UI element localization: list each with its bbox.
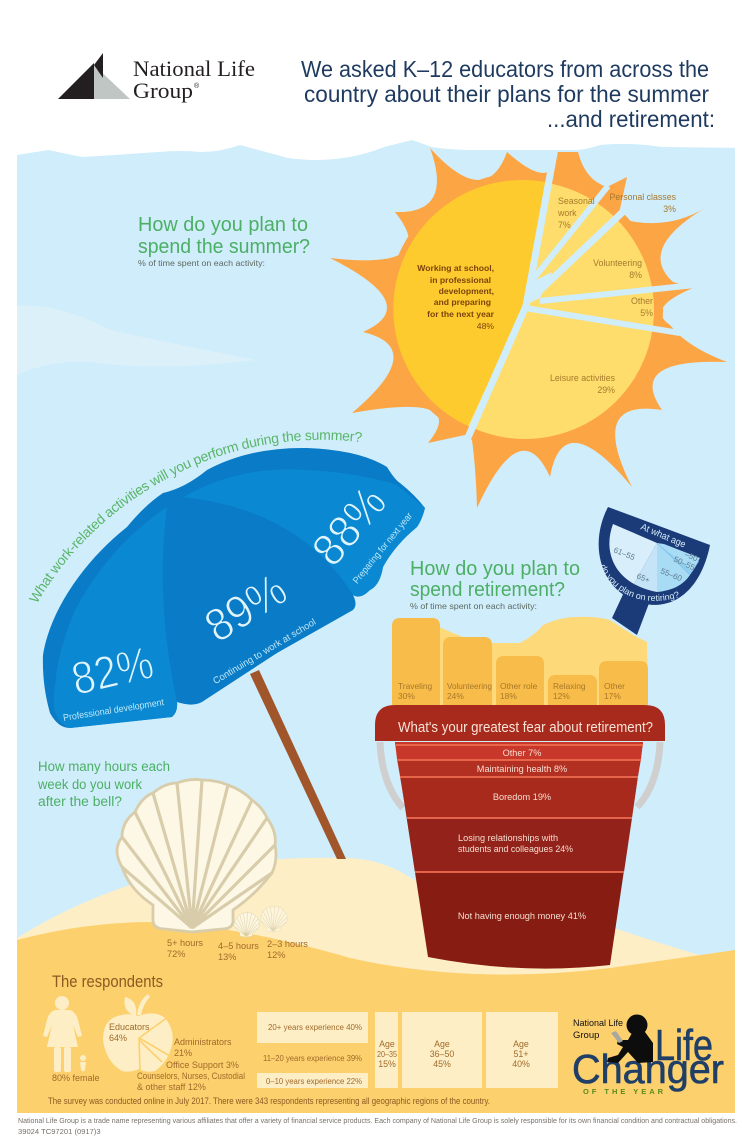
stat: 82%: 82% [67, 636, 158, 705]
cloud [17, 306, 255, 375]
icon: woman and child [43, 996, 86, 1072]
logo: National Life Group [58, 53, 255, 103]
stat: 89%: 89% [195, 563, 296, 652]
background: sky [17, 140, 735, 970]
umbrella panel: left [54, 507, 177, 728]
umbrella pole [250, 670, 346, 859]
band labels: Boredom 19% [493, 792, 551, 802]
logo: Life Changer of the Year: OF THE YEAR [583, 1087, 664, 1096]
logo: Life Changer of the Year: National Life [573, 1018, 623, 1029]
band: maintaining health 8% [397, 759, 641, 776]
panel: age boxes: Age [379, 1039, 395, 1049]
logo: Life Changer of the Year: Changer [572, 1046, 724, 1092]
panel: shovel retirement age chart: do you plan on retiring? [602, 564, 678, 601]
band labels: Losing relationships with [458, 833, 558, 843]
footer disclaimer [18, 1116, 737, 1136]
slice label: working at school: development, [439, 286, 494, 296]
band: boredom 19% [400, 776, 638, 818]
heading: summer: % of time spent on each activity: [138, 258, 265, 268]
band: losing relationships 24% [407, 818, 632, 872]
age labels [612, 546, 700, 585]
slice label: working at school: and preparing [434, 297, 491, 307]
slice labels: other activities: Other [631, 296, 653, 306]
heading: the respondents: The respondents [52, 972, 163, 991]
panel: age boxes: Age [513, 1039, 529, 1049]
bar: relaxing 12% [548, 675, 597, 705]
slice labels: other activities [550, 192, 677, 395]
heading: summer [138, 214, 310, 268]
slice label: working at school: in professional [430, 275, 491, 285]
bar: traveling 30%: Traveling [398, 681, 432, 691]
panel: age boxes: 15% [378, 1059, 396, 1069]
heading: hours after the bell: How many hours each [38, 759, 170, 774]
age labels: 61–55 [612, 546, 637, 562]
shovel text: At what age [639, 522, 687, 551]
bar: other 17%: 17% [604, 691, 621, 701]
heading: hours after the bell [37, 759, 170, 809]
logo: Life Changer of the Year: Group [573, 1030, 599, 1041]
bar: other role 18%: Other role [500, 681, 538, 691]
age labels: –50 [683, 550, 700, 564]
age labels: 65+ [635, 572, 652, 585]
arc heading: work-related activities: What work-related activities will you perform during the summer? [28, 431, 362, 602]
logo: Life Changer of the Year [572, 1014, 724, 1096]
label: 80% female: 80% female [52, 1073, 100, 1083]
apple labels [109, 1022, 245, 1092]
slice labels: other activities: 29% [597, 385, 615, 395]
slice label: working at school: for the next year [427, 309, 495, 319]
apple slice lines [139, 1017, 170, 1071]
shell labels: 2–3 hours [267, 939, 308, 949]
band: other 7% [395, 742, 643, 759]
icon: apple [103, 994, 173, 1072]
panel: sand bar chart [392, 617, 648, 705]
heading: retirement: % of time spent on each activity: [410, 601, 537, 611]
slice labels: other activities: 5% [640, 308, 653, 318]
panel: age boxes: 20–35 [377, 1050, 397, 1059]
icon: small shell [260, 906, 287, 932]
slice labels: other activities: work [557, 208, 577, 218]
sand: light dune [17, 858, 735, 1000]
band labels: students and colleagues 24% [458, 844, 573, 854]
bucket handle [380, 742, 660, 808]
title: country about their plans for the summer [304, 81, 709, 107]
bar: volunteering 24% [443, 637, 492, 705]
shovel handle [612, 588, 651, 635]
panel: umbrella chart [43, 448, 425, 728]
label: preparing for next year: Preparing for next year [351, 511, 415, 586]
apple labels: 21% [174, 1048, 192, 1058]
panel: experience boxes [257, 1012, 368, 1088]
apple labels: Counselors, Nurses, Custodial [137, 1071, 245, 1081]
footer disclaimer: 39024 TC97201 (0917)3 [18, 1127, 101, 1136]
shell labels: 12% [267, 950, 285, 960]
rim heading: What's your greatest fear about retirement? [398, 720, 653, 736]
slice labels: other activities: 8% [629, 270, 642, 280]
band labels: Not having enough money 41% [458, 911, 586, 921]
bar: other role 18%: 18% [500, 691, 517, 701]
panel: shells hours chart [117, 779, 308, 962]
bar: other 17%: Other [604, 681, 625, 691]
heading: hours after the bell: after the bell? [38, 794, 122, 809]
bucket rim [375, 705, 665, 741]
shell labels: 13% [218, 952, 236, 962]
umbrella panel: right [183, 469, 425, 597]
bar: traveling 30% [392, 618, 440, 705]
heading: retirement: How do you plan to [410, 558, 580, 580]
icon: sail triangle [58, 53, 130, 99]
heading: hours after the bell: week do you work [37, 777, 142, 792]
panel: experience boxes: 0–10 years experience 22% [266, 1076, 362, 1086]
panel: age boxes [375, 1012, 558, 1088]
panel: apple chart [103, 994, 245, 1092]
logo: Life Changer of the Year: Life [655, 1021, 713, 1070]
slice labels: other activities: Leisure activities [550, 373, 616, 383]
label: continuing to work at school: Continuing to work at school [211, 617, 318, 687]
white margin right [735, 140, 750, 1137]
slice gaps [466, 148, 695, 442]
panel: shovel retirement age chart [598, 507, 710, 635]
slice labels: other activities: 3% [663, 204, 676, 214]
bar: other role 18% [496, 656, 544, 705]
bar: other 17% [599, 661, 648, 705]
logo: National Life Group: ® [194, 82, 200, 90]
panel: age boxes: 36–50 [430, 1049, 454, 1059]
sand: gold foreground [17, 922, 735, 1113]
title: ...and retirement: [547, 106, 715, 132]
panel: summer sun pie chart [330, 148, 727, 508]
pie: working at school slice 48% [393, 180, 545, 426]
band separators [396, 745, 643, 872]
apple labels: & other staff 12% [137, 1082, 206, 1092]
icon: medium shell [234, 913, 259, 937]
sun rays [330, 148, 727, 508]
shell labels [167, 938, 308, 962]
panel: age boxes: 45% [433, 1059, 451, 1069]
heading: summer: How do you plan to [138, 214, 308, 236]
panel: bucket fear chart [375, 705, 665, 969]
survey note: The survey was conducted online in July 2017. There were 343 respondents representing all geographic regions of the country. [48, 1096, 490, 1106]
slice labels: other activities: 7% [558, 220, 571, 230]
bar: traveling 30%: 30% [398, 691, 415, 701]
bar: relaxing 12%: Relaxing [553, 681, 586, 691]
band labels: Maintaining health 8% [477, 764, 567, 774]
band labels: Other 7% [503, 748, 541, 758]
shovel head [599, 507, 710, 605]
heading: retirement: spend retirement? [410, 579, 565, 601]
label: professional development: Professional development [62, 697, 165, 724]
panel: experience boxes: 20+ years experience 40% [268, 1022, 362, 1032]
bar: volunteering 24%: Volunteering [447, 681, 492, 691]
logo: National Life Group: National Life [133, 56, 255, 81]
age labels: 50–55 [672, 555, 697, 572]
panel: age boxes: Age [434, 1039, 450, 1049]
heading: summer: spend the summer? [138, 236, 310, 258]
apple labels: Office Support 3% [166, 1060, 239, 1070]
icon: large shell [117, 779, 276, 932]
age labels: 55–60 [659, 567, 684, 583]
panel: experience boxes: 11–20 years experience 39% [263, 1053, 362, 1063]
slice label: working at school: 48% [477, 321, 494, 331]
slice labels: other activities: Personal classes [610, 192, 677, 202]
title: We asked K–12 educators from across the [301, 56, 709, 82]
shell labels: 72% [167, 949, 185, 959]
icon: child reading [607, 1014, 653, 1063]
panel: age boxes: 40% [512, 1059, 530, 1069]
slice labels: other activities: Seasonal [558, 196, 595, 206]
panel: age boxes: 51+ [514, 1049, 528, 1059]
title [301, 56, 715, 132]
apple labels: Educators [109, 1022, 150, 1032]
umbrella canopy [43, 448, 425, 728]
bucket body [395, 742, 643, 969]
pie: light slices [396, 181, 654, 439]
stat: 88%: 88% [301, 476, 396, 575]
shell labels: 4–5 hours [218, 941, 259, 951]
sand mound [430, 617, 648, 705]
apple labels: 64% [109, 1033, 127, 1043]
slice labels: other activities: Volunteering [593, 258, 642, 268]
age fan segments [609, 524, 700, 592]
bar: volunteering 24%: 24% [447, 691, 464, 701]
slice label: working at school [417, 263, 495, 331]
shell labels: 5+ hours [167, 938, 203, 948]
apple labels: Administrators [174, 1037, 232, 1047]
band labels [458, 748, 586, 921]
bar: relaxing 12%: 12% [553, 691, 570, 701]
logo: National Life Group: Group [133, 78, 193, 103]
slice label: working at school: Working at school, [417, 263, 494, 273]
heading: retirement [410, 558, 580, 611]
